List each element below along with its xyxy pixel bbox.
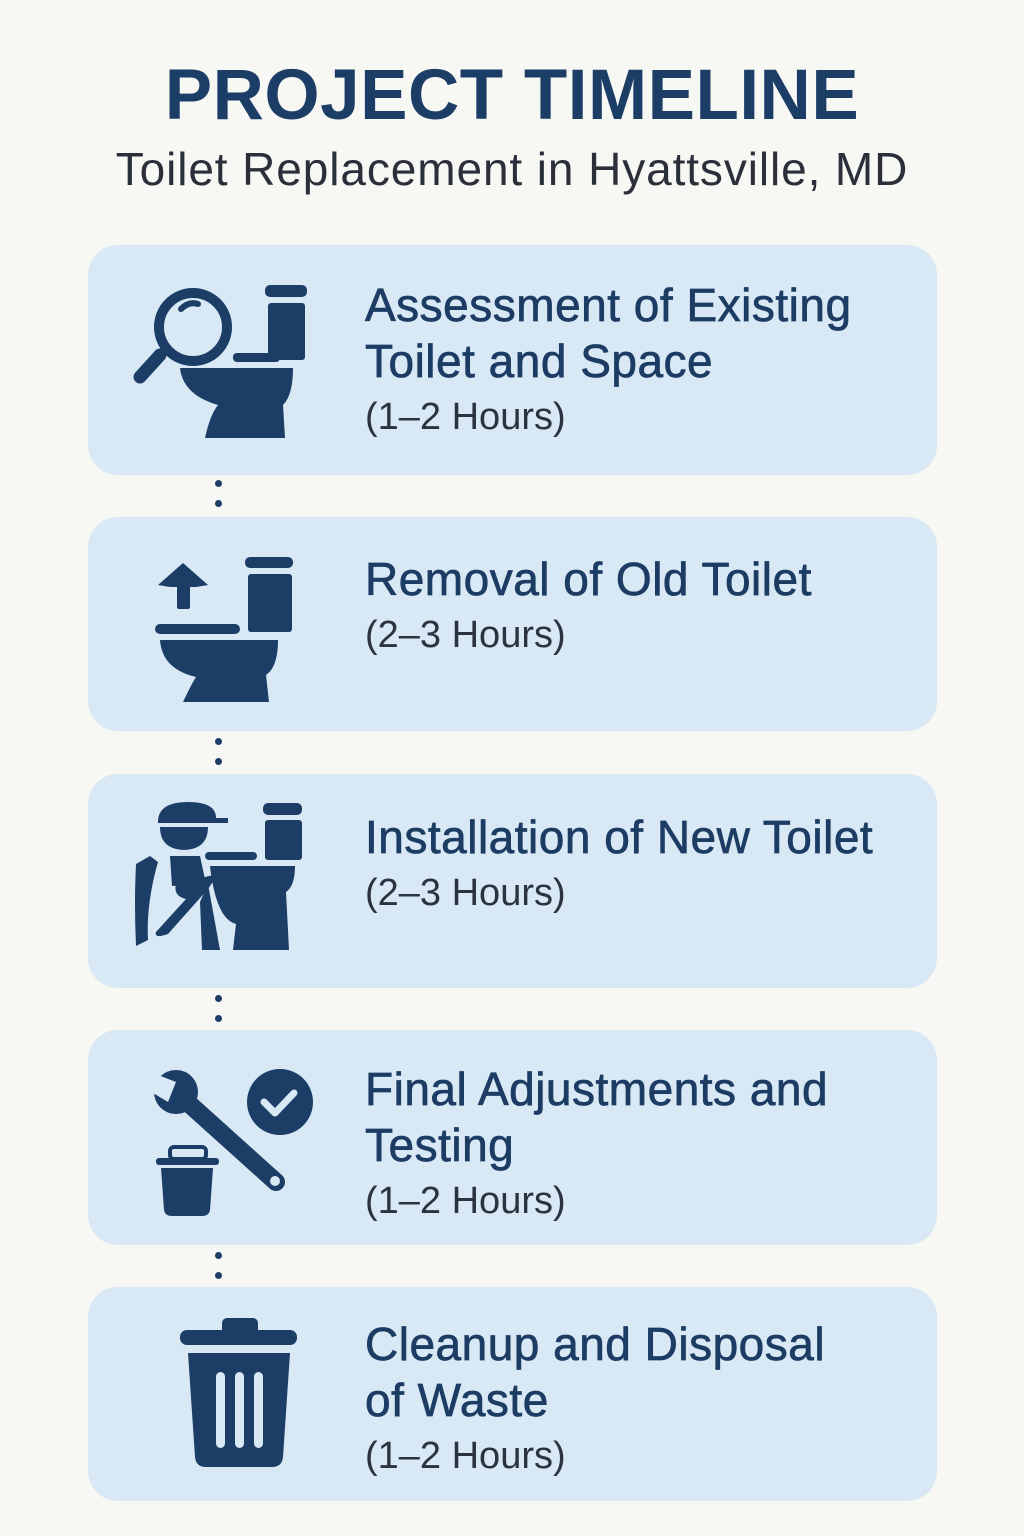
text: removal: (2–3 Hours) [365, 614, 566, 656]
text: removal: Removal of Old Toilet [365, 553, 812, 605]
connector dots 4 [215, 1252, 222, 1279]
text: assessment: (1–2 Hours) [365, 396, 566, 438]
text: final adjustments: Testing [365, 1119, 514, 1171]
icon: trash can [180, 1318, 297, 1467]
connector dots 2 [215, 738, 222, 765]
text: assessment: Assessment of Existing [365, 279, 852, 331]
text: assessment: Toilet and Space [365, 335, 713, 387]
text: installation [365, 811, 873, 914]
icon: plumber and toilet [135, 802, 302, 950]
subtitle: Toilet Replacement in Hyattsville, MD [116, 143, 908, 195]
connector dots 1 [215, 480, 222, 507]
connector dots 3 [215, 995, 222, 1022]
icon: wrench, check, bucket [154, 1069, 313, 1216]
text: final adjustments [365, 1063, 828, 1222]
icon: magnifier and toilet [134, 285, 307, 438]
panel: cleanup [88, 1287, 937, 1501]
text: cleanup: of Waste [365, 1374, 549, 1426]
text: cleanup: Cleanup and Disposal [365, 1318, 825, 1370]
text: final adjustments: Final Adjustments and [365, 1063, 828, 1115]
panel: installation [88, 774, 937, 988]
text: assessment [364, 279, 852, 438]
icon: toilet with arrow [155, 557, 293, 702]
text: removal [365, 553, 812, 656]
panel: removal [88, 517, 937, 731]
title: PROJECT TIMELINE [165, 56, 859, 135]
text: cleanup: (1–2 Hours) [365, 1435, 566, 1477]
text: installation: Installation of New Toilet [365, 811, 873, 863]
panel: final adjustments [88, 1030, 937, 1245]
text: cleanup [365, 1318, 825, 1477]
panel: assessment [88, 245, 937, 475]
text: installation: (2–3 Hours) [365, 872, 566, 914]
text: final adjustments: (1–2 Hours) [365, 1180, 566, 1222]
